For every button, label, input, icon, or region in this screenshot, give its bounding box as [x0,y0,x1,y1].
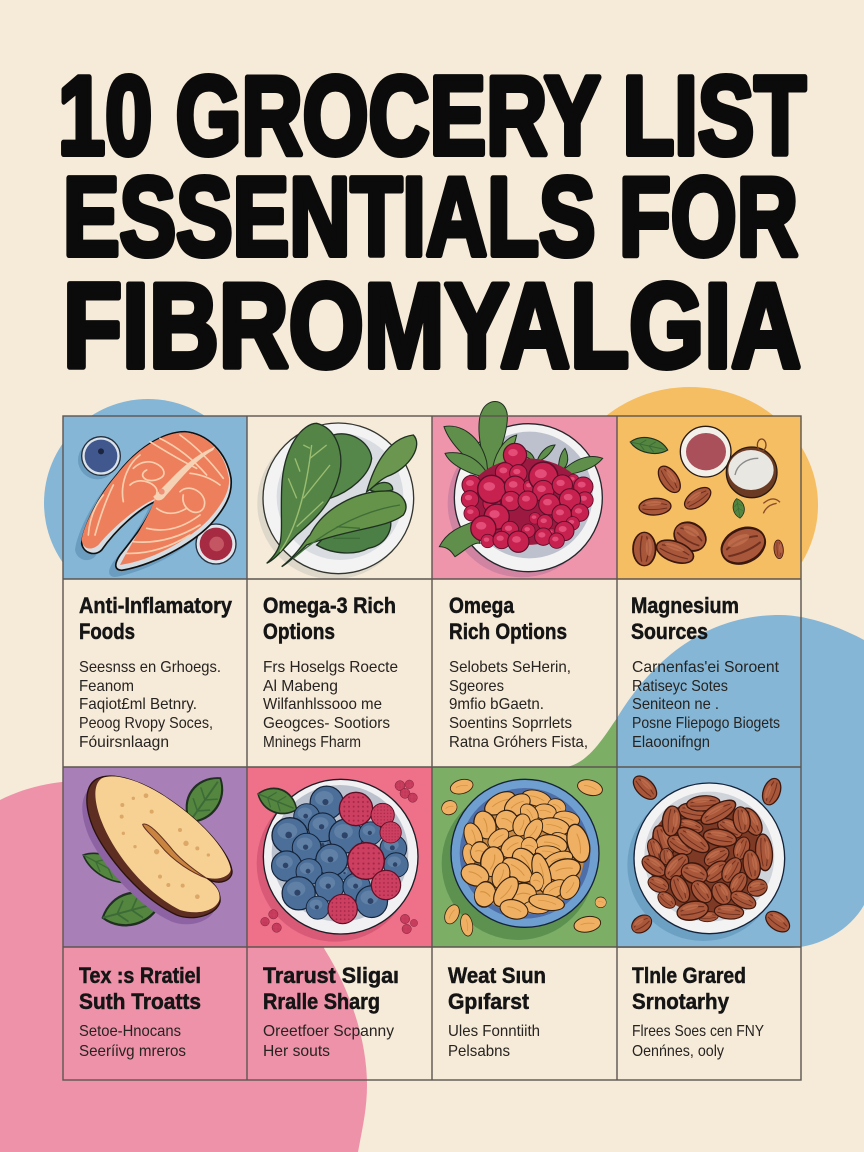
panel text: Anti-Inflamatory Foods: Seesnss en Grhoegs. [79,659,221,676]
panel text: Omega-3 Rich Options: Frs Hoselgs Roecte [263,659,398,676]
panel text: Weat Siun: Gpıfarst [448,989,529,1014]
panel text: Omega-3 Rich Options: Options [263,619,335,644]
panel text: Anti-Inflamatory Foods: Fóuirsnlaagn [79,734,169,751]
panel text: Tex:s Rratiel: Tex :s Rratiel [79,963,201,988]
panel text: Magnesium Sources [631,593,780,751]
panel text: Tex:s Rratiel: Setoe-Hnocans [79,1023,181,1040]
background blob: blue right [617,615,864,948]
icon: almonds in a white bowl [627,772,793,941]
panel text: Omega Rich Options: Rich Options [449,619,567,644]
icon: blueberries and raspberries in a bowl [254,779,418,942]
background blob: green corner [567,718,617,767]
panel text: Tlnle Grared: Srnotarhy [632,989,729,1014]
panel text: Omega-3 Rich Options: Mninegs Fharm [263,734,361,751]
panel text: Omega-3 Rich Options: Omega-3 Rich [263,593,396,618]
panel text: Weat Siun: Pelsabns [448,1043,510,1060]
icon: salmon steak with berry and sauce [75,432,236,577]
cream cell backgrounds [63,416,801,767]
panel text: Omega-3 Rich Options: Al Mabeng [263,678,338,695]
panel text: Trarust Sligai: Oreetfoer Scpanny [263,1023,394,1040]
panel text: Anti-Inflamatory Foods: Feanom [79,678,134,695]
grid lines [63,416,801,1080]
background blob: pink bottom left [0,780,367,1152]
panel text: Anti-Inflamatory Foods [79,593,232,751]
panel text: Anti-Inflamatory Foods: Foods [79,619,135,644]
panel text: Omega-3 Rich Options: Wilfanhlssooo me [263,696,382,713]
icon: spinach leaves on a plate [257,423,417,579]
background circle: blue top left [44,399,252,607]
panel text: Anti-Inflamatory Foods: Faqiot£ml Betnry. [79,696,197,713]
panel text: Magnesium Sources: Seniteon ne . [632,696,719,713]
panel text: Omega Rich Options: Sgeores [449,678,504,695]
panel text: Tlnle Grared [632,963,764,1060]
panel text: Magnesium Sources: Elaoonifngn [632,734,710,751]
panel text: Tlnle Grared: Tlnle Grared [632,963,746,988]
icon: bowl of orange nuts [439,777,606,940]
panel text: Magnesium Sources: Sources [631,619,708,644]
icon: raspberries in a bowl with leaves [439,401,603,577]
panel text: Omega-3 Rich Options: Geogces- Sootiors [263,715,390,732]
panel text: Magnesium Sources: Posne Fliepogo Biogets [632,715,780,732]
cell image backgrounds [63,416,801,947]
panel text: Omega Rich Options: 9mfio bGaetn. [449,696,544,713]
panel text: Weat Siun: Ules Fonntiith [448,1023,540,1040]
background circle: orange top right [562,387,818,623]
panel text: Omega Rich Options [449,593,588,751]
panel text: Tex:s Rratiel: Suth Troatts [79,989,201,1014]
panel text: Magnesium Sources: Magnesium [631,593,739,618]
panel text: Trarust Sligai: Trarust Sligaı [263,963,399,988]
icon: sliced bread with leaves [79,769,232,932]
panel text: Trarust Sligai: Her souts [263,1043,330,1060]
panel text: Tlnle Grared: Oenńnes, ooly [632,1043,724,1060]
panel text: Weat Siun: Weat Sıun [448,963,546,988]
panel text: Omega-3 Rich Options [263,593,398,751]
panel text: Trarust Sligai [263,963,399,1060]
icon: nuts, coconut and leaves [629,426,784,570]
panel text: Tex:s Rratiel [79,963,201,1060]
panel text: Omega Rich Options: Selobets SeHerin, [449,659,571,676]
panel text: Magnesium Sources: Ratiseyc Sotes [632,678,728,695]
title [58,54,806,393]
panel text: Magnesium Sources: Carnenfas'ei Soroent [632,659,780,676]
panel text: Tlnle Grared: Flrees Soes cen FNY [632,1023,764,1040]
panel text: Weat Siun [448,963,546,1060]
panel text: Trarust Sligai: Rralle Sharg [263,989,380,1014]
panel text: Omega Rich Options: Soentins Soprrlets [449,715,572,732]
panel text: Anti-Inflamatory Foods: Peoog Rvopy Soces, [79,715,213,732]
panel text: Anti-Inflamatory Foods: Anti-Inflamatory [79,593,232,618]
panel text: Omega Rich Options: Ratna Gróhers Fista, [449,734,588,751]
panel text: Tex:s Rratiel: Seeríivg mreros [79,1043,186,1060]
panel text: Omega Rich Options: Omega [449,593,514,618]
